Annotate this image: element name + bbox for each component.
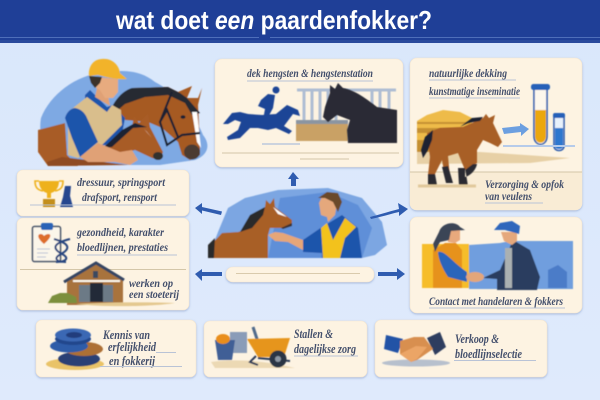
header banner xyxy=(0,0,600,43)
icon: stable xyxy=(48,263,175,306)
icon: foal xyxy=(418,114,502,186)
icon: jumping rider xyxy=(223,86,300,140)
label: Contact met handelaren & fokkers xyxy=(429,294,563,308)
icon: stacked rings xyxy=(46,328,104,370)
text: stallen: Stallen & xyxy=(294,326,333,341)
icon: trophy xyxy=(35,181,73,207)
arrow: right upper xyxy=(370,203,408,219)
icon: black horse xyxy=(323,83,397,143)
foal xyxy=(103,114,163,160)
text: bloodline selection: bloedlijnselectie xyxy=(455,346,522,361)
scene xyxy=(422,221,573,290)
text: stud farm: een stoeterij xyxy=(129,287,180,301)
pill label xyxy=(226,267,374,282)
text: trotting and racing: drafsport, rensport xyxy=(82,190,158,204)
label: foal care: Verzorging & opfok xyxy=(485,177,564,191)
mare xyxy=(113,86,202,160)
arrow: up xyxy=(288,172,299,186)
panel: breeding and foal care xyxy=(410,58,582,210)
panel: health and stud farm xyxy=(17,218,189,310)
panel: knowledge of heredity xyxy=(36,320,196,377)
title: wat doet een paardenfokker? xyxy=(115,5,432,35)
label: van veulens: van veulens xyxy=(485,189,532,203)
fence and stall xyxy=(296,90,396,141)
arrow: left lower xyxy=(195,269,222,281)
arrow: to tubes xyxy=(502,123,529,136)
text: en fokkerij: en fokkerij xyxy=(109,353,155,368)
panel: sales and bloodline selection xyxy=(375,320,547,377)
horse xyxy=(208,198,292,258)
text: sports: dressuur, springsport xyxy=(77,175,166,189)
text: daily care: dagelijkse zorg xyxy=(294,341,356,356)
text: kennis van: Kennis van xyxy=(102,327,150,342)
icon: clipboard and DNA xyxy=(32,223,70,262)
label: kunstmatige inseminatie: kunstmatige inseminatie xyxy=(429,84,520,98)
heading: dek hengsten: dek hengsten & hengstenstation xyxy=(247,66,373,80)
text: health: gezondheid, karakter xyxy=(76,225,164,239)
center illustration: breeder with horse xyxy=(208,188,387,258)
panel: equestrian sports xyxy=(17,170,189,216)
icon: test tubes xyxy=(531,84,565,150)
arrow: right lower xyxy=(378,268,405,280)
man xyxy=(85,90,125,145)
illustration: breeder with mare and foal xyxy=(38,59,207,166)
icon: handshake xyxy=(382,332,450,366)
arrow: left upper xyxy=(195,203,222,215)
panel: stables and daily care xyxy=(204,321,367,377)
icon: bucket and wheelbarrow xyxy=(211,327,295,368)
hay and sand xyxy=(417,110,570,164)
text: verkoop: Verkoop & xyxy=(455,331,499,346)
text: work at stud: werken op xyxy=(129,276,173,290)
text: bloodlines: bloedlijnen, prestaties xyxy=(77,240,168,254)
panel: contact with traders and breeders xyxy=(410,217,582,313)
man in vest xyxy=(268,232,303,250)
panel: stallions and stallion station xyxy=(215,59,403,167)
text: erfelijkheid: erfelijkheid xyxy=(108,339,156,354)
label: natuurlijke dekking: natuurlijke dekking xyxy=(429,66,507,80)
